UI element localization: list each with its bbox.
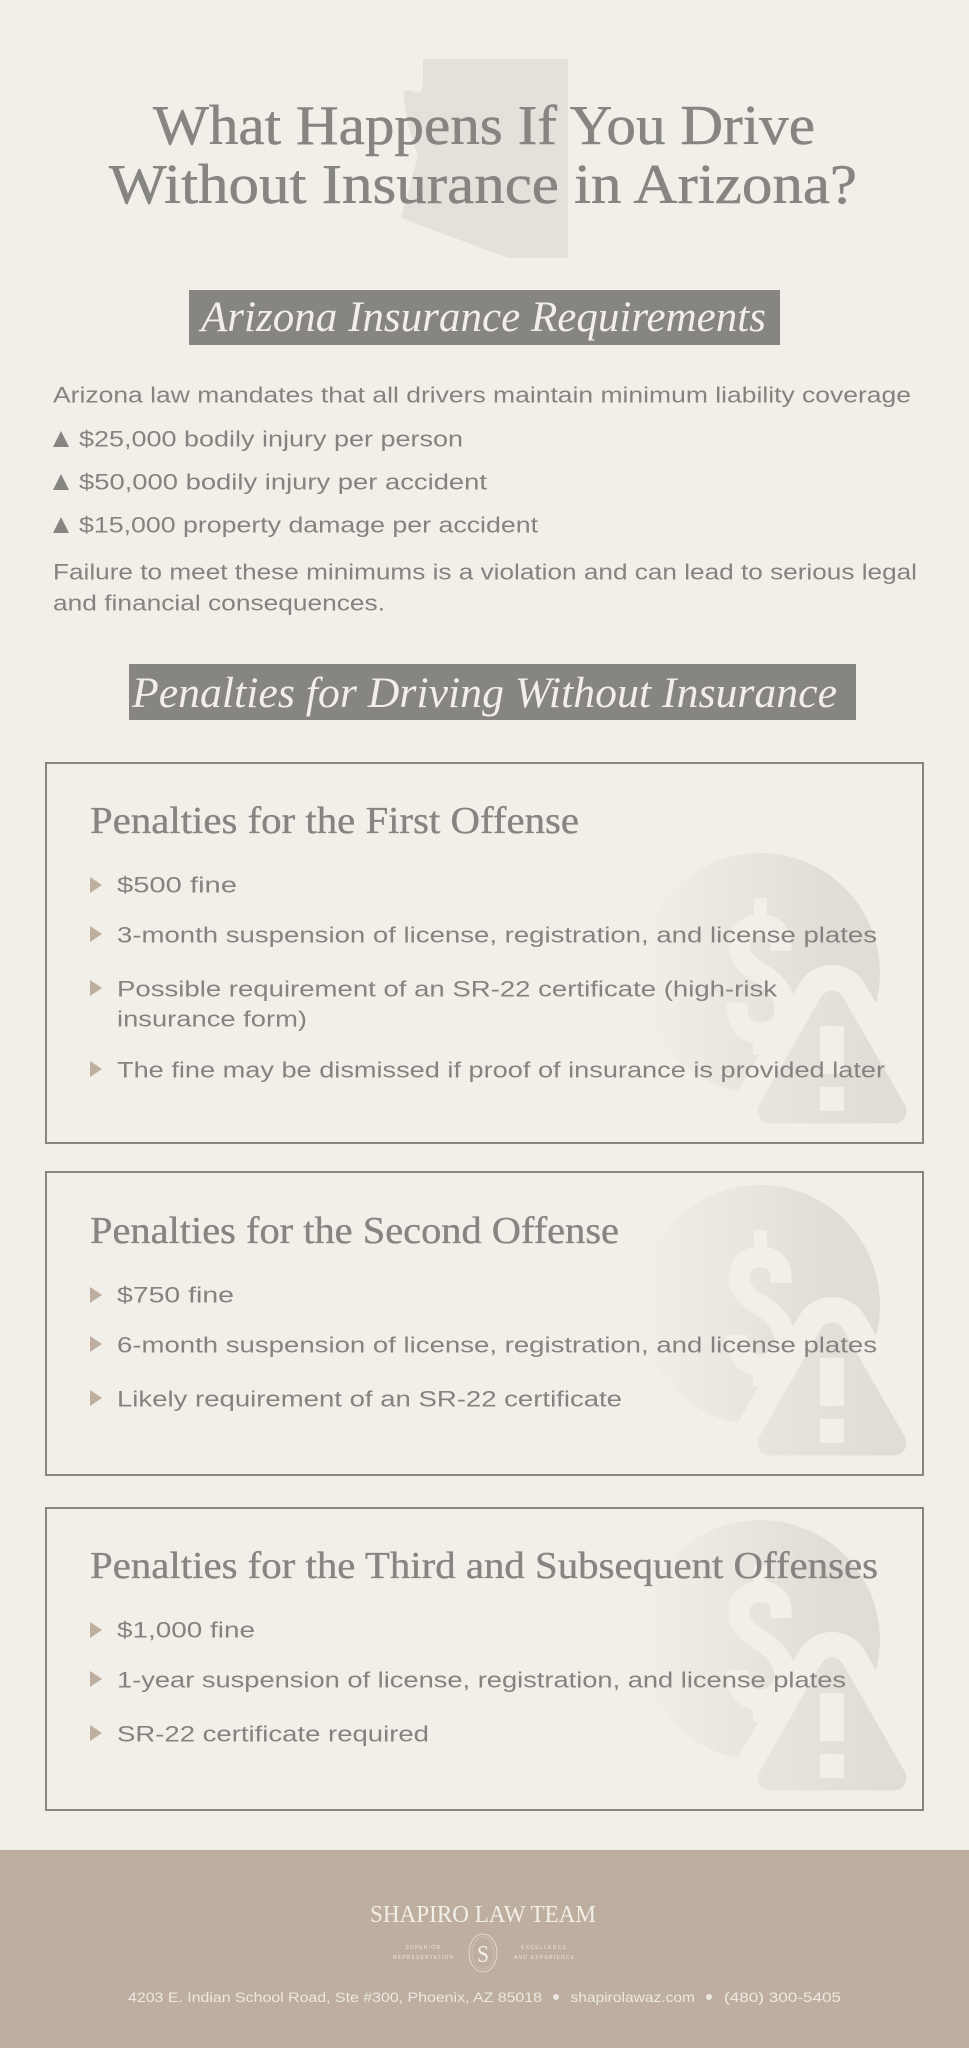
panel heading: Penalties for the Second Offense xyxy=(90,1210,619,1252)
bullet: $500 fine xyxy=(90,872,237,898)
title: What Happens If You Drive xyxy=(153,95,815,157)
panel: second offense xyxy=(46,1172,923,1475)
footer xyxy=(0,1850,969,2048)
contact line: shapirolawaz.com xyxy=(570,1989,695,2005)
bullet: SR-22 requirement: insurance form) xyxy=(117,1006,307,1032)
tagline: excellence and experience: AND EXPERIENCE xyxy=(514,1955,575,1961)
panel: third and subsequent offenses xyxy=(46,1508,923,1810)
list item: property damage per accident: $15,000 property damage per accident xyxy=(79,512,539,538)
tagline: superior representation: REPRESENTATION xyxy=(393,1955,453,1961)
heading: Arizona Insurance Requirements: Arizona Insurance Requirements xyxy=(198,294,766,341)
bullet: 1-year suspension: 1-year suspension of license, registration, and license plates xyxy=(117,1668,846,1692)
icon: dollar coin with warning triangle xyxy=(640,853,894,1111)
text block: requirements: Arizona law mandates that all drivers maintain minimum liability coverage xyxy=(53,382,911,408)
panel heading: Penalties for the First Offense xyxy=(90,800,579,842)
bullet: $750 fine: $750 fine xyxy=(117,1282,234,1308)
title xyxy=(109,95,857,216)
icon: dollar coin with warning triangle xyxy=(640,1185,894,1443)
bullet: $1,000 fine: $1,000 fine xyxy=(117,1618,255,1642)
tagline: excellence and experience: EXCELLENCE xyxy=(521,1945,567,1951)
bullet: 6-month suspension: 6-month suspension of license, registration, and license plates xyxy=(117,1332,877,1358)
bullet: fine may be dismissed: The fine may be dismissed if proof of insurance is provided later xyxy=(117,1058,886,1082)
heading: Penalties for Driving Without Insurance: Penalties for Driving Without Insurance xyxy=(131,670,837,717)
bullet: 3-month suspension: 3-month suspension of license, registration, and license plates xyxy=(117,922,877,948)
bullet: SR-22 required: SR-22 certificate required xyxy=(117,1722,429,1746)
icon: Arizona state silhouette xyxy=(401,59,568,258)
bullet: $750 fine xyxy=(90,1282,234,1308)
bullet: SR-22 requirement: Possible requirement of an SR-22 certificate (high-risk xyxy=(117,976,778,1002)
contact line xyxy=(128,1989,841,2005)
contact line: (480) 300-5405 xyxy=(724,1989,841,2005)
bullet: SR-22 likely: Likely requirement of an SR-22 certificate xyxy=(117,1386,622,1412)
list item: bodily injury per accident: $50,000 bodily injury per accident xyxy=(79,470,488,494)
footer logo wordmark: SHAPIRO LAW TEAM xyxy=(370,1902,596,1928)
icon: dollar coin with warning triangle xyxy=(640,1520,894,1778)
tagline: excellence and experience xyxy=(514,1945,575,1961)
icon: emblem monogram: S xyxy=(477,1942,489,1968)
text block: requirements xyxy=(53,382,917,616)
bullet: $1,000 fine xyxy=(90,1618,255,1642)
contact line: 4203 E. Indian School Road, Ste #300, Phoenix, AZ 85018 xyxy=(128,1989,542,2005)
icon: emblem monogram xyxy=(469,1934,497,1972)
text block: requirements: and financial consequences. xyxy=(53,590,385,616)
text block: requirements: Failure to meet these minimums is a violation and can lead to serious legal xyxy=(53,560,917,584)
bullet: $500 fine: $500 fine xyxy=(117,872,237,898)
title: Without Insurance in Arizona? xyxy=(109,154,857,216)
panel heading: Penalties for the Third and Subsequent Offenses xyxy=(90,1545,878,1587)
list item: bodily injury per person: $25,000 bodily injury per person xyxy=(79,426,463,452)
bullet: SR-22 requirement xyxy=(90,976,778,1032)
tagline: superior representation: SUPERIOR xyxy=(406,1945,440,1951)
tagline: superior representation xyxy=(393,1945,453,1961)
panel: first offense xyxy=(46,763,923,1143)
